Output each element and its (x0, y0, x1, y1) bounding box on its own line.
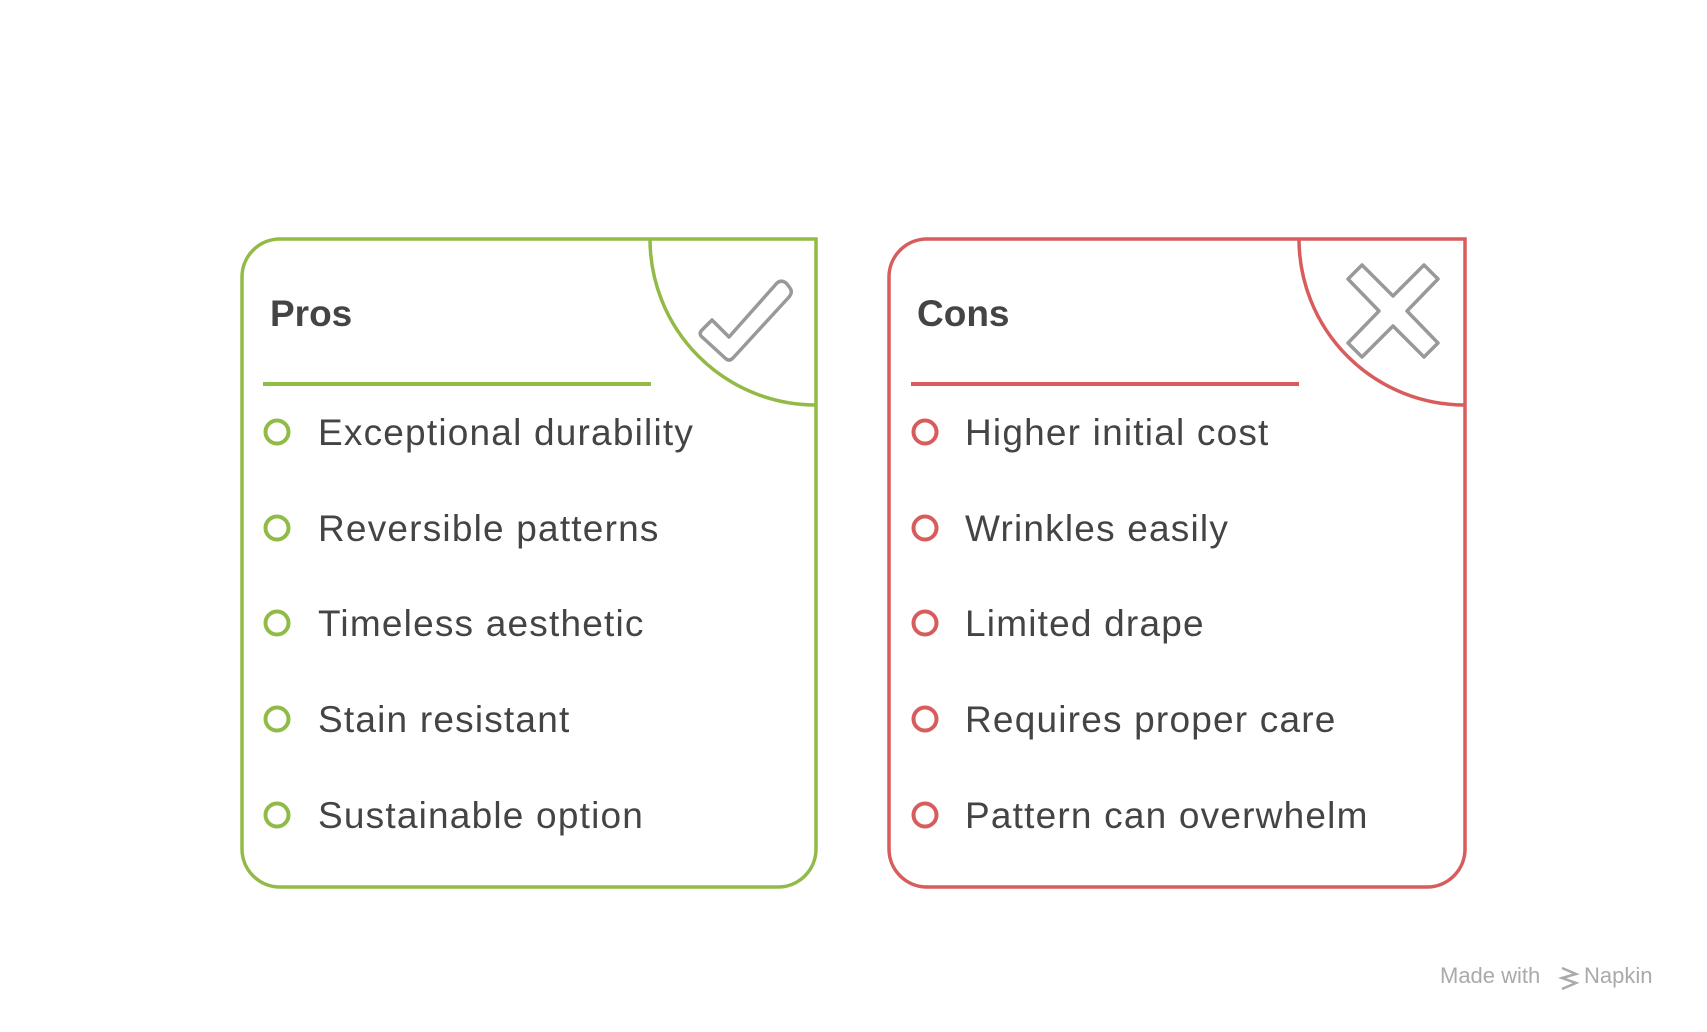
footer: made with napkin (1440, 963, 1652, 989)
list: pros items (266, 412, 694, 836)
list: cons items (914, 412, 1369, 836)
list: pros items: Exceptional durability (318, 412, 694, 453)
panel: cons (889, 239, 1465, 887)
footer: made with napkin: Napkin (1584, 963, 1652, 988)
list: cons items: Requires proper care (965, 699, 1337, 740)
icon: check (700, 281, 791, 360)
list: cons items: Limited drape (965, 603, 1205, 644)
icon: cross (1348, 265, 1438, 357)
list: cons items: Wrinkles easily (965, 508, 1229, 549)
list: pros items: Timeless aesthetic (318, 603, 645, 644)
list: pros items: Sustainable option (318, 795, 644, 836)
list: pros items: Reversible patterns (318, 508, 660, 549)
list: cons items: Pattern can overwhelm (965, 795, 1369, 836)
heading: Pros: Pros (270, 293, 352, 334)
list: pros items: Stain resistant (318, 699, 570, 740)
panel: pros (242, 239, 816, 887)
footer: made with napkin: Made with (1440, 963, 1540, 988)
heading: Cons: Cons (917, 293, 1010, 334)
list: cons items: Higher initial cost (965, 412, 1270, 453)
